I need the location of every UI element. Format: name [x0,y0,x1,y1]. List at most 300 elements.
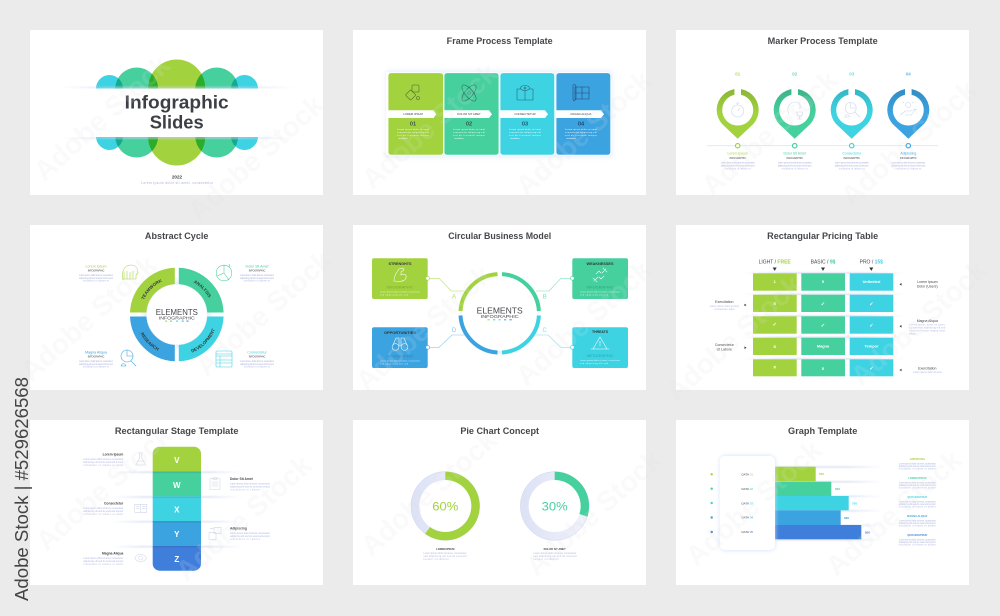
letter markers: D [452,328,457,334]
text: quis nostrud: QUIS NOSTRUD [907,495,927,499]
text: magna aliqua: incididunt ut labore et dolor [83,563,123,566]
text: right labels: aliqua [909,333,916,336]
text: dolor sit amet: Lorem ipsum dolor sit amet, consectetur [240,274,274,277]
row shadows [741,272,906,359]
text: magna aliqua [899,514,936,528]
card: opportunities: INFOGRAPHIC [386,354,414,358]
donut 30% [520,472,589,540]
plan headers: LIGHT / FREE [759,260,791,266]
text: consectetur [83,502,124,516]
card: strengths [372,258,430,299]
bar chart [771,467,870,539]
text: right labels: Lorem ipsum dolor sit amet, [909,324,946,327]
text: left labels: Exercitation [715,300,733,304]
icon: pie chart [216,264,232,281]
marker 02: adipiscing elit sed do eiusmod tempor [778,164,812,168]
panel: rectangular stage template [30,420,323,585]
text: magna aliqua: adipiscing elit sed do eiusmod tempor [79,363,113,366]
text: adipiscing: Lorem ipsum dolor sit amet, consectetur [230,532,270,535]
card 03: incididunt [510,137,520,140]
text: right labels: Dolor (Users) [917,285,938,289]
marker 01: Lorem Ipsum [727,152,748,156]
text: lorem ipsum: incididunt ut labore et [83,280,109,283]
panel: frame process template [353,30,646,195]
bar chart: 850 [865,530,870,534]
marker 01: adipiscing elit sed do eiusmod tempor [721,164,755,168]
text: adipiscing: adipiscing elit sed do eiusmod tempor [230,535,270,538]
text: lorem ipsum [899,476,936,489]
text: magna aliqua: Lorem ipsum dolor sit amet, consectetur [79,360,113,363]
text: lorem ipsum: incididunt ut labore et dolore [899,486,936,489]
text: right labels: Magna Aliqua [917,319,938,323]
text: consectetur: Consectetur [247,351,267,355]
connector lines [428,278,572,347]
stock watermarks: Adobe Stock [182,89,330,227]
heading: Circular Business Model [448,231,551,241]
text: right labels: consectetur adipiscing elit sed [909,327,946,330]
text: adipiscing: ADIPISCING [910,457,925,461]
marker 04: incididunt ut labore et [895,168,922,170]
text: lorem ipsum: adipiscing elit sed do eiusmod tempor [899,484,936,487]
card: opportunities: sed adipiscing elit sed [380,362,409,366]
card: opportunities: Lorem ipsum dolor sit amet, consectetur [380,360,420,362]
text: lorem ipsum: LOREM IPSUM [908,476,926,480]
stage column: X [174,505,180,514]
stock id side label: Adobe Stock | #529626568 [12,377,32,601]
text: magna aliqua: MAGNA ALIQUA [907,514,928,518]
card 01 [388,73,444,155]
marker 04: 04 [906,71,911,76]
pricing grid: ✓ [869,323,874,329]
text: quis nostrud blue: adipiscing elit sed do eiusmod tempor [899,541,936,544]
donut 30% caption: sed adipiscing elit sed do eiusmod [534,555,577,558]
card: threats: Lorem ipsum dolor sit amet, consectetur [580,359,620,362]
heading: Rectangular Stage Template [115,426,239,436]
card 04: consectetur adipiscing elit [565,131,597,134]
plan headers [759,260,883,271]
marker 04: INFOGRAPHIC [900,157,917,160]
year and caption: Lorem ipsum dolor sit amet, consectetur [141,181,214,185]
pricing grid: ✓ [869,366,874,372]
donut 60%: 60% [432,500,459,514]
card 01: Lorem ipsum dolor sit amet [397,128,429,131]
text: left labels: consectetur adipi [714,308,735,311]
stock watermarks: Adobe Stock [510,254,658,392]
data card: DATA 01 [742,472,753,476]
text: adipiscing: adipiscing elit sed do eiusmod tempor [899,465,936,468]
pricing grid: Tempor [865,344,879,348]
text: lorem ipsum: adipiscing elit sed do eiusmod tempor [79,277,113,280]
white title band [30,88,323,137]
text: left labels: Consectetur [715,343,735,347]
icon: flexed arm [394,268,406,281]
stock watermarks: Adobe Stock [350,259,498,397]
marker 02: incididunt ut labore et [782,168,808,170]
stock watermarks: Adobe Stock [28,49,176,187]
card 04: Lorem ipsum dolor sit amet [565,128,597,131]
bar chart: 600 [835,487,840,491]
icon: hand with idea [900,102,916,115]
stock watermarks: Adobe Stock [820,444,968,582]
text: consectetur [240,351,274,369]
year and caption [141,175,214,185]
marker 04: Lorem ipsum dolor sit amet, consectetur [891,162,925,164]
card: strengths: Lorem ipsum dolor sit amet, consectetur [380,290,420,294]
card 02 [444,73,499,155]
cycle diagram: ANALYSIS [194,280,211,298]
icon: magnifier [121,350,136,366]
text: quis nostrud blue: Lorem ipsum dolor sit amet, consectetur [899,538,936,542]
text: dolor sit amet: Dolor Sit Amet [230,477,254,481]
cycle diagram [130,268,224,362]
icon: open book with eye [517,86,533,100]
text: consectetur: Consectetur [104,502,124,506]
icon: flask [136,453,146,465]
marker 04: Adipiscing [900,152,916,156]
cycle diagram: DEVELOPMENT [191,328,214,352]
marker 03: incididunt ut labore et [839,168,865,170]
marker 02: Lorem ipsum dolor sit amet, consectetur [778,162,812,164]
text: dolor sit amet: Lorem ipsum dolor sit amet, consectetur [230,483,270,486]
card 03: Lorem ipsum dolor sit amet [509,128,541,131]
donut 30%: 30% [542,500,568,514]
icon: browser window [216,351,232,367]
text: right labels: Lorem Ipsum [917,280,938,284]
year and caption: 2022 [172,175,183,180]
text: adipiscing [899,457,936,470]
text: adipiscing: incididunt ut labore [230,538,261,541]
data card: DATA 04 [742,516,753,520]
heading: Marker Process Template [768,36,878,46]
text: left labels [710,300,739,352]
card: weaknesses: sed adipiscing elit sed [580,294,609,296]
icon: binoculars [392,338,408,350]
heading: Pie Chart Concept [460,426,539,436]
ring diagram [460,274,539,353]
bar chart: 720 [852,501,857,505]
card 02: DOLOR SIT AMET [457,112,481,116]
text: lorem ipsum: Lorem Ipsum [103,452,123,456]
marker 03: adipiscing elit sed do eiusmod tempor [835,164,869,168]
panel: abstract cycle [30,225,323,390]
heading: Rectangular Pricing Table [767,231,878,241]
text: dolor sit amet: incididunt ut labore [230,489,261,492]
banner [500,110,548,118]
marker 03: INFOGRAPHIC [843,157,860,160]
data card [720,456,775,550]
icon: dice [405,85,420,100]
cover circles [96,60,258,166]
icon: head with gears [123,265,138,280]
text: consectetur: adipiscing elit sed do eiusmod tempor [240,363,274,366]
card: threats: sed adipiscing elit sed [580,362,609,365]
text: right labels: Exercitation [918,366,936,370]
icon: puzzle [209,527,221,539]
cycle diagram: INFOGRAPHIC [159,316,196,320]
donut 30% caption [534,547,577,561]
marker 02: 02 [792,71,798,76]
card: opportunities: OPPORTUNITIES [384,331,416,335]
text: magna aliqua: Lorem ipsum dolor sit amet, consectetur [83,557,123,560]
ring diagram: ELEMENTS [477,306,523,316]
card: threats [570,327,628,368]
cover title [125,91,229,133]
row pointers [744,283,902,371]
marker 02: INFOGRAPHIC [786,157,803,160]
marker 01: Lorem ipsum dolor sit amet, consectetur [721,162,755,164]
cover title: Slides [150,112,204,133]
card: opportunities [372,327,430,368]
card 01: consectetur adipiscing elit [397,131,429,134]
donut 30% caption: Lorem ipsum dolor sit amet, consectetur [534,552,577,555]
text: left labels: Lorem ipsum dolor sit amet [710,305,739,308]
legend dots [710,473,713,533]
text: magna aliqua: adipiscing elit sed do eiusmod tempor [899,522,936,525]
pricing grid: 5 [822,279,825,284]
text: quis nostrud blue: incididunt ut labore et dolore [899,544,936,546]
data card: DATA 05 [742,530,753,534]
card: strengths: INFOGRAPHIC [386,286,414,290]
card 02: sed do eiusmod tempor [453,134,485,137]
text: dolor sit amet: INFOGRAPHIC [249,270,266,272]
text: dolor sit amet: adipiscing elit sed do eiusmod tempor [230,486,270,489]
text: right labels: Lorem ipsum dolor sit amet [913,371,942,374]
text: quis nostrud blue [899,533,936,546]
pricing grid: Magna [817,344,830,348]
pricing grid: × [773,365,776,371]
icon: clipboard [210,478,220,490]
text: consectetur: INFOGRAPHIC [249,356,266,359]
banner [444,110,492,118]
stage column: W [173,481,181,490]
text: quis nostrud: adipiscing elit sed do eiusmod tempor [899,503,936,506]
pricing grid: × [773,302,776,308]
icon: head with trophy [788,102,803,119]
card 02: consectetur adipiscing elit [453,131,485,134]
pricing grid: ✓ [869,302,874,308]
icon: warning triangle [591,337,609,349]
data card: DATA 02 [742,487,753,491]
icon: broken chain [593,268,607,282]
panel: graph template [676,420,969,585]
stage column [153,447,201,571]
stock watermarks: Adobe Stock [680,434,828,572]
stock watermarks: Adobe Stock [520,444,668,582]
card 04: sed do eiusmod tempor [565,134,597,137]
text: magna aliqua: Magna Aliqua [85,351,107,355]
icon: stopwatch [732,103,744,117]
card: weaknesses [570,258,628,299]
pricing grid: × [822,366,825,372]
card 04: incididunt [566,137,576,140]
text: quis nostrud: incididunt ut labore et dolore [899,506,936,508]
icon: map scroll [573,85,589,101]
stock watermarks: Adobe Stock [660,269,808,407]
text: magna aliqua: incididunt ut labore et dolore [899,524,936,528]
stock watermarks: Adobe Stock [190,244,338,382]
text: lorem ipsum: INFOGRAPHIC [88,270,105,272]
stock watermarks: Adobe Stock [15,249,163,387]
card 03: 03 [522,122,528,128]
icon: atom [460,83,478,103]
cycle diagram: TEAMWORK [141,279,162,299]
letter markers: A [452,294,456,300]
text: consectetur: Lorem ipsum dolor sit amet, consectetur [240,360,274,363]
stock watermarks: Adobe Stock [170,449,318,587]
marker 01: 01 [735,71,741,76]
panel: rectangular pricing table [676,225,969,390]
marker 04 [887,71,929,170]
card 02: incididunt [454,137,464,140]
text: magna aliqua: adipiscing elit sed do eiusmod tempor [83,560,123,563]
letter markers [452,294,548,334]
text: right labels [909,280,946,374]
heading: Abstract Cycle [145,231,208,241]
panel: marker process template [676,30,969,195]
card: strengths: STRENGHTS [388,262,412,266]
donut 60% [411,472,480,540]
marker 03: Consectetur [842,152,862,156]
icon: magnifier with pie [845,102,860,117]
stage shadows [110,472,243,547]
panel: circular business model [353,225,646,390]
text: lorem ipsum [83,452,123,467]
stock watermarks: Adobe Stock [510,64,658,202]
card 03: CONSECTETUR [514,112,536,116]
donut 30% caption: DOLOR SIT AMET [544,547,566,551]
text: dolor sit amet [240,264,274,283]
stage column: Y [174,530,180,539]
text: consectetur: adipiscing elit sed do eiusmod tempor [83,510,123,513]
card 02: Lorem ipsum dolor sit amet [453,128,485,131]
cycle diagram: ELEMENTS [156,307,198,317]
bar chart: 500 [819,472,824,476]
stage column: Z [174,555,179,564]
timeline [707,144,938,147]
card 04 [556,73,611,155]
stock watermarks: Adobe Stock [696,64,844,202]
text: lorem ipsum: Lorem ipsum dolor sit amet, consectetur [83,458,123,461]
text: magna aliqua: Lorem ipsum dolor sit amet, consectetur [899,520,936,522]
card 01: incididunt [398,137,408,140]
heading: Graph Template [788,426,857,436]
heading: Frame Process Template [447,36,553,46]
cycle diagram: RESEARCH [140,332,159,351]
text: dolor sit amet: adipiscing elit sed do eiusmod tempor [240,277,274,280]
text: quis nostrud: Lorem ipsum dolor sit amet, consectetur [899,500,936,504]
marker 03: Lorem ipsum dolor sit amet, consectetur [835,162,869,164]
pricing grid: ✓ [773,322,777,328]
card: weaknesses: WEAKNESSES [586,262,614,266]
text: lorem ipsum: Lorem Ipsum [86,264,106,268]
marker 03 [831,71,873,170]
letter markers: C [543,328,548,334]
text: quis nostrud blue: QUIS NOSTRUD [907,533,927,537]
text: right labels: eiusmod tempor magna dolor [909,330,945,333]
text: adipiscing: incididunt ut labore et dolore [899,468,936,470]
plan headers: PRO / 15$ [860,260,883,266]
card: threats: INFOGRAPHIC [586,354,614,358]
text: magna aliqua [79,351,113,369]
panel: pie chart concept [353,420,646,585]
card: weaknesses: Lorem ipsum dolor sit amet, consectetur [580,290,620,294]
text: dolor sit amet [230,477,270,492]
marker 02 [774,71,816,170]
text: magna aliqua: INFOGRAPHIC [88,356,105,359]
text: quis nostrud [899,495,936,508]
pricing grid: Unlimited [863,279,881,284]
text: consectetur: Lorem ipsum dolor sit amet, consectetur [83,507,123,510]
text: consectetur: incididunt ut labore et [244,366,270,369]
card 03 [500,73,555,155]
pricing grid: ✓ [821,302,825,308]
card 04: 04 [578,122,585,128]
marker 04: adipiscing elit sed do eiusmod tempor [891,164,925,168]
data card: DATA 03 [742,501,753,505]
text: lorem ipsum [79,264,113,283]
data card glow [720,456,775,550]
marker 01 [717,71,759,170]
stage column: V [174,456,180,465]
pricing grid [753,273,893,376]
plan headers: BASIC / 9$ [811,260,836,266]
text: magna aliqua: Magna Aliqua [102,551,123,555]
donut 60% caption: tempor incididunt [424,558,449,561]
stock watermarks: Adobe Stock [356,57,504,195]
stock watermarks: Adobe Stock [835,74,983,212]
cover title: Infographic [125,91,229,112]
banner [388,110,436,118]
marker 01: incididunt ut labore et [725,168,751,170]
text: lorem ipsum: Lorem ipsum dolor sit amet, consectetur [899,481,936,484]
stock watermarks: Adobe Stock [355,424,503,562]
donut 30% caption: tempor incididunt [534,558,559,561]
icon: eye [135,554,147,562]
text: adipiscing: Adipiscing [230,527,247,531]
pricing grid: ✓ [821,323,825,329]
donut 60% caption: LOREM IPSUM [436,547,454,551]
text: adipiscing [230,527,270,541]
donut 60% caption: Lorem ipsum dolor sit amet, consectetur [424,552,467,555]
text: left labels: Ut Labore [717,348,732,352]
donut 60% caption [424,547,467,561]
card: threats: THREATS [592,330,608,334]
card 01: LOREM IPSUM [403,112,423,116]
icon: open book [135,504,147,512]
stock watermarks: Adobe Stock [845,254,993,392]
text: lorem ipsum: adipiscing elit sed do eiusmod tempor [83,461,123,464]
ring diagram: INFOGRAPHIC [481,314,520,319]
text: adipiscing: Lorem ipsum dolor sit amet, consectetur [899,462,936,466]
stock watermarks: Adobe Stock [30,419,178,557]
text: lorem ipsum: incididunt ut labore et dolor [83,464,123,467]
marker 03: 03 [849,71,855,76]
text: dolor sit amet: incididunt ut labore et [244,280,270,283]
panel: infographic slides cover [30,30,323,195]
text: magna aliqua: incididunt ut labore et [83,366,109,369]
banner [556,110,604,118]
donut 60% caption: sed adipiscing elit sed do eiusmod [424,555,467,558]
text: magna aliqua [83,551,123,566]
marker 01: INFOGRAPHIC [729,157,746,160]
bar shadows [776,466,883,540]
marker 02: Dolor Sit Amet [784,152,806,156]
card 01: 01 [410,122,416,128]
pricing grid: 1 [774,279,777,284]
card 03: consectetur adipiscing elit [509,131,541,134]
text: consectetur: incididunt ut labore et dolor [83,513,123,516]
text: lorem ipsum: Lorem ipsum dolor sit amet, consectetur [79,274,113,277]
